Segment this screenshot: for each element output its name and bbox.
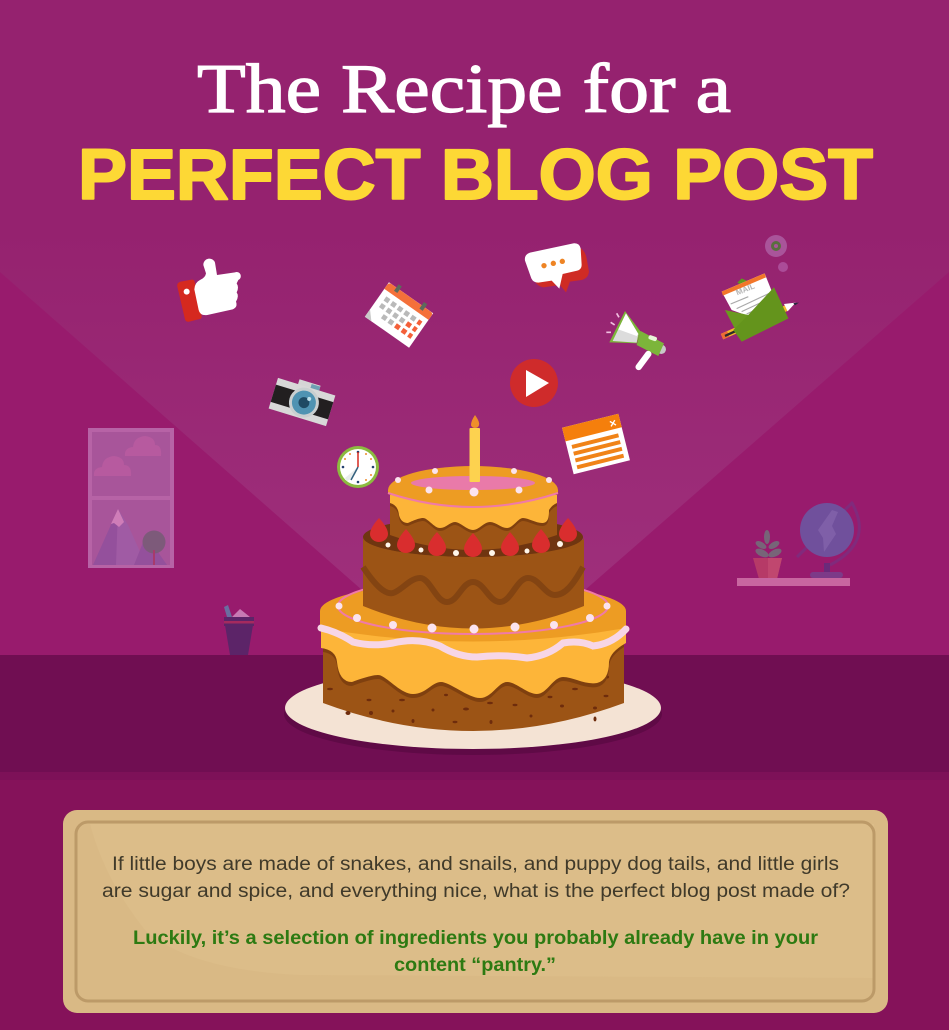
pink top glaze (411, 476, 535, 490)
pearls (336, 468, 610, 634)
icon: thumbs up (177, 259, 241, 322)
highlighted text (133, 928, 819, 976)
strawberries (370, 518, 577, 557)
candle (470, 415, 480, 482)
icon: browser window: × (608, 416, 618, 431)
title (78, 51, 873, 215)
icon: megaphone (606, 311, 666, 367)
icon: calendar (365, 279, 435, 348)
icon: mail envelope with pencil (722, 273, 799, 342)
icon: speech bubble (525, 243, 589, 292)
intro text (102, 854, 850, 902)
letter: MAIL (735, 281, 756, 297)
icon: browser window (562, 414, 630, 474)
intro panel (63, 810, 888, 1013)
shelf with plant and globe (737, 502, 859, 586)
icon: play button (510, 359, 558, 407)
pencil (722, 303, 799, 337)
chocolate wave (363, 567, 583, 602)
bottom tier sponge (323, 640, 624, 731)
icon: clock (337, 446, 379, 488)
highlighted text: Luckily, it’s a selection of ingredients you probably already have in your (133, 928, 819, 949)
icon: email at sign bubbles (765, 235, 788, 272)
plant (753, 530, 783, 579)
clouds (94, 436, 161, 476)
icon: camera (269, 373, 337, 426)
shelf board (737, 578, 850, 586)
bottom tier icing (320, 578, 626, 702)
plate (284, 667, 662, 755)
window (88, 428, 174, 568)
title line 1: The Recipe for a (197, 51, 731, 128)
middle tier (363, 517, 584, 628)
tree (142, 530, 166, 565)
calendar day grid (374, 296, 422, 339)
mountains (93, 509, 167, 565)
globe (797, 502, 859, 578)
highlighted text: content “pantry.” (394, 955, 556, 976)
wood grain highlight (90, 824, 874, 978)
top tier (388, 466, 558, 550)
cream wave (321, 628, 626, 658)
intro text: If little boys are made of snakes, and snails, and puppy dog tails, and little girls (112, 854, 839, 875)
bucket on floor (224, 605, 254, 655)
intro text: are sugar and spice, and everything nice, what is the perfect blog post made of? (102, 881, 850, 902)
pink ring (338, 578, 608, 634)
title line 2: PERFECT BLOG POST (78, 136, 873, 215)
cake (284, 415, 662, 755)
